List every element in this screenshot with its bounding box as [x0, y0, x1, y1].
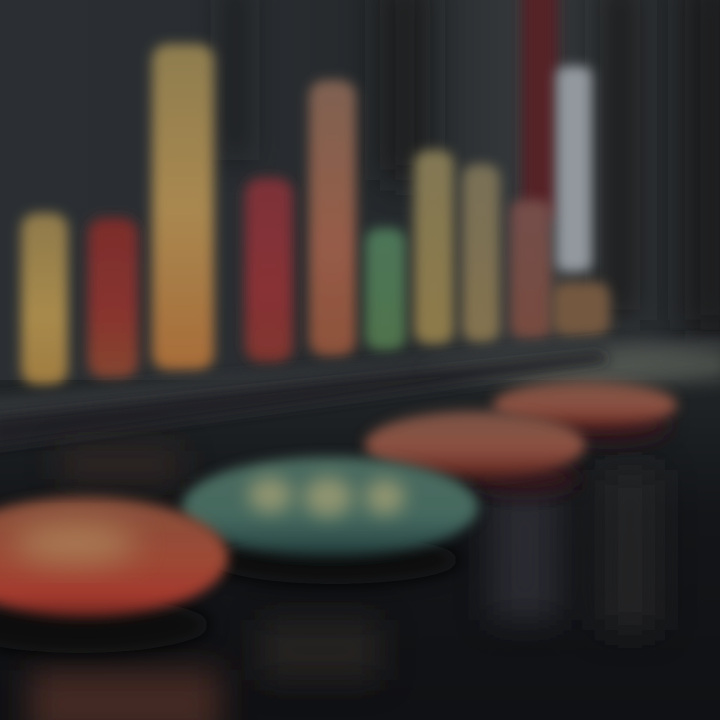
- disc: far salmon: [493, 381, 677, 443]
- bar 8 tan: [462, 164, 500, 342]
- disc: middle salmon: [365, 411, 585, 494]
- bar 4 red: [245, 178, 293, 362]
- bar 10 dark red: [522, 0, 558, 220]
- bar 12 short tan: [552, 282, 610, 336]
- bar 6 green: [365, 228, 406, 350]
- bar 11 white: [556, 66, 592, 272]
- bar 1 yellow: [21, 213, 68, 385]
- disc highlight: [13, 523, 137, 563]
- bar 2 red: [88, 218, 138, 378]
- disc: green: [182, 457, 478, 584]
- disc highlights: [248, 477, 405, 517]
- background floor: [0, 380, 720, 720]
- bars: [21, 0, 610, 385]
- bar 7 tan: [414, 150, 454, 344]
- background wall: [0, 0, 720, 420]
- dark wall columns: [225, 0, 720, 330]
- shelf: [0, 340, 720, 448]
- bar 9 rust: [510, 200, 552, 338]
- bar 5 terracotta: [309, 80, 356, 356]
- disc: red: [0, 497, 228, 653]
- floor reflections: [30, 450, 660, 720]
- bar 3 tall tan: [152, 44, 214, 370]
